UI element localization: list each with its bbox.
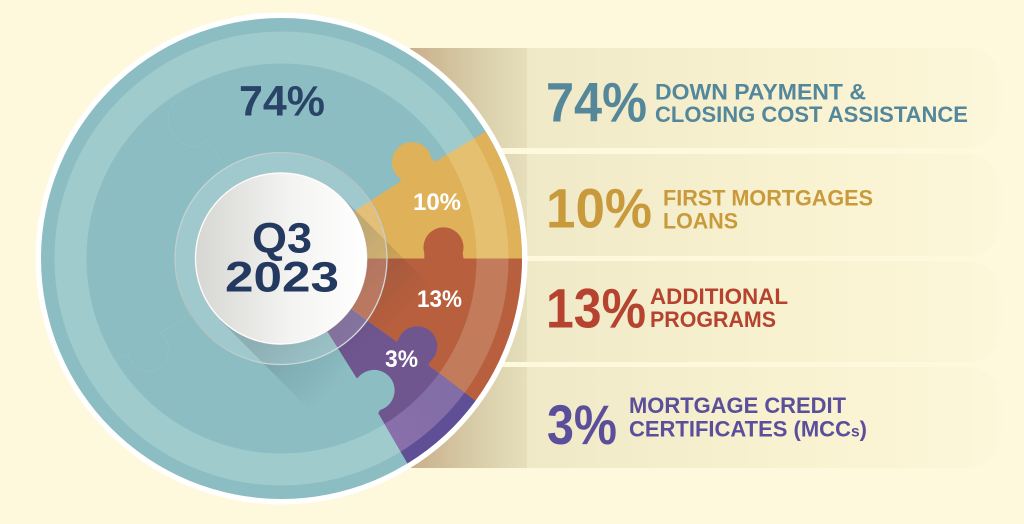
legend: 74% down payment: 74% — [546, 71, 647, 134]
legend: 10% first mortgages: 10% — [546, 177, 652, 240]
legend: 3% mortgage credit certificates — [547, 393, 867, 456]
disc long shadow — [220, 197, 416, 392]
legend: 3% mortgage credit certificates: CERTIFICATES (MCCs) — [629, 417, 867, 442]
legend: 10% first mortgages — [546, 177, 873, 240]
panel: mortgage credit certificates row — [410, 367, 1002, 468]
center disc — [194, 172, 368, 345]
chart label: 13%: 13% — [417, 286, 462, 313]
donut puzzle chart — [36, 12, 530, 504]
chart label: 3%: 3% — [385, 346, 418, 373]
legend: 3% mortgage credit certificates: 3% — [547, 393, 617, 456]
legend: 74% down payment: DOWN PAYMENT & — [655, 80, 866, 104]
legend: 3% mortgage credit certificates: MORTGAGE CREDIT — [629, 393, 846, 418]
legend: 10% first mortgages: FIRST MORTGAGES — [663, 186, 873, 211]
panel: first mortgages row — [410, 154, 1002, 256]
legend: 13% additional programs: ADDITIONAL — [650, 284, 788, 309]
legend: 74% down payment: CLOSING COST ASSISTANCE — [655, 102, 968, 127]
panel: down payment row — [410, 48, 1002, 148]
chart label: 10%: 10% — [413, 189, 461, 216]
segment: 74% teal — [41, 18, 522, 499]
center label: Q3 2023 — [225, 215, 339, 302]
legend: 13% additional programs: 13% — [546, 277, 646, 340]
legend: 13% additional programs — [546, 277, 788, 340]
segment: 10% yellow — [354, 132, 522, 258]
center label: Q3 2023: 2023 — [225, 254, 339, 302]
legend: 10% first mortgages: LOANS — [663, 209, 738, 234]
legend: 13% additional programs: PROGRAMS — [650, 307, 776, 332]
center label: Q3 2023: Q3 — [252, 215, 312, 263]
legend: 74% down payment — [546, 71, 968, 134]
segment: 13% red — [351, 227, 522, 401]
panel: additional programs row — [410, 261, 1002, 362]
glass ring — [175, 152, 387, 364]
chart label: 74%: 74% — [239, 78, 325, 126]
segment: 3% purple — [328, 309, 476, 464]
